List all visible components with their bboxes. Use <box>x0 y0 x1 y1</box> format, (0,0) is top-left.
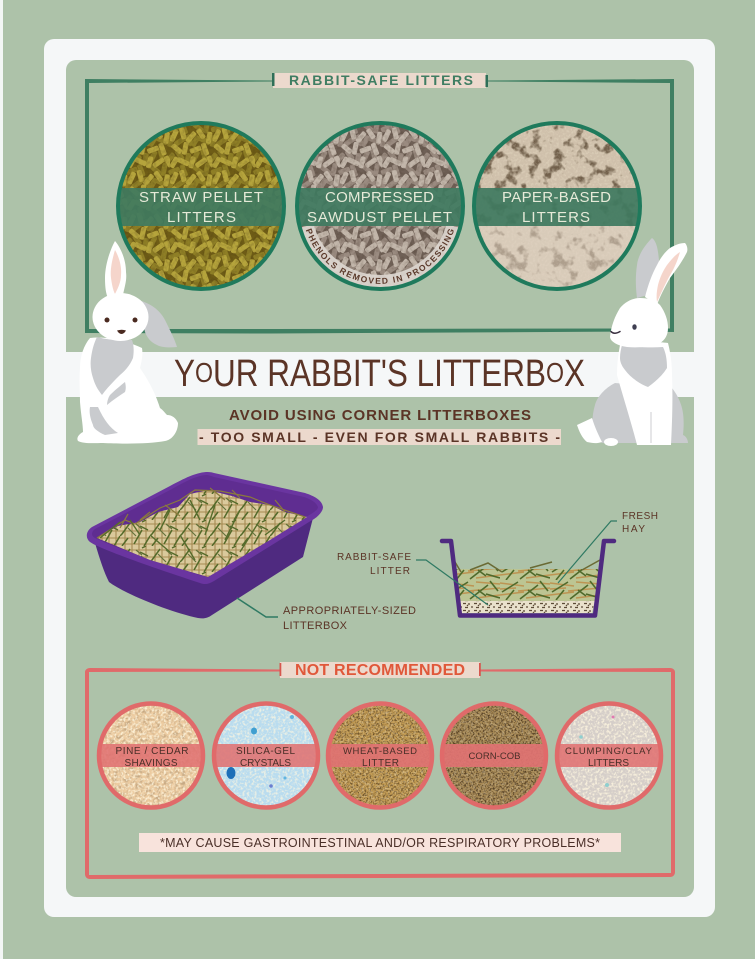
circle: clumping/clay litters <box>555 702 663 810</box>
circle: wheat-based litter <box>326 702 434 810</box>
heading: rabbit-safe litters: RABBIT-SAFE LITTERS <box>289 72 473 88</box>
title: UR RABBIT'S LITTERB <box>213 353 546 395</box>
panel: rabbit-safe litters <box>85 72 674 334</box>
circle: silica-gel crystals <box>212 702 320 810</box>
leader line: rabbit-safe litter <box>416 560 488 605</box>
circle: wheat-based litter: LITTER <box>362 758 399 769</box>
title: O <box>195 357 213 388</box>
text: avoid corner litterboxes: AVOID USING CORNER LITTERBOXES <box>229 407 531 424</box>
label: rabbit-safe litter: LITTER <box>370 566 410 577</box>
rabbit right <box>577 238 688 446</box>
curved note: phenols removed: PHENOLS REMOVED IN PROCESSING <box>306 228 454 284</box>
circle: compressed sawdust pellet <box>295 121 465 291</box>
label: appropriately-sized litterbox: APPROPRIATELY-SIZED <box>283 605 416 617</box>
circle: corn-cob <box>440 702 548 810</box>
label: appropriately-sized litterbox: LITTERBOX <box>283 620 348 632</box>
leader line: litterbox <box>237 598 278 617</box>
callout: too small: - TOO SMALL - EVEN FOR SMALL RABBITS - <box>199 429 560 445</box>
circle: pine / cedar shavings <box>97 702 205 810</box>
title band <box>44 352 715 397</box>
inner green panel <box>66 60 694 897</box>
circle: clumping/clay litters: CLUMPING/CLAY <box>565 746 653 757</box>
panel: not recommended <box>85 662 675 879</box>
title: X <box>564 353 585 395</box>
label: rabbit-safe litter <box>337 552 411 577</box>
circle: straw pellet litters: LITTERS <box>167 209 236 226</box>
note: health warning: *MAY CAUSE GASTROINTESTINAL AND/OR RESPIRATORY PROBLEMS* <box>160 836 600 850</box>
leader line: fresh hay <box>558 521 617 583</box>
rabbit left <box>77 241 178 444</box>
red frame <box>85 668 675 879</box>
note: health warning <box>139 833 621 852</box>
illustration: purple litterbox <box>87 472 323 618</box>
title: O <box>546 357 564 388</box>
circle: paper-based litters <box>472 121 642 291</box>
circle: silica-gel crystals: SILICA-GEL <box>236 746 295 757</box>
heading: not recommended: NOT RECOMMENDED <box>295 662 465 679</box>
circle: pine / cedar shavings: SHAVINGS <box>124 758 178 769</box>
circle: compressed sawdust pellet: COMPRESSED <box>325 189 434 206</box>
label: fresh hay: HAY <box>622 524 645 535</box>
illustration: litterbox cross-section <box>442 541 614 616</box>
green frame <box>85 79 674 334</box>
label: rabbit-safe litter: RABBIT-SAFE <box>337 552 411 563</box>
circle: wheat-based litter: WHEAT-BASED <box>343 746 417 757</box>
circle: silica-gel crystals: CRYSTALS <box>240 758 291 769</box>
circle: pine / cedar shavings: PINE / CEDAR <box>116 746 188 757</box>
label: appropriately-sized litterbox <box>283 605 416 632</box>
circle: paper-based litters: PAPER-BASED <box>502 189 611 206</box>
circle: corn-cob: CORN-COB <box>468 751 520 762</box>
circle: compressed sawdust pellet: SAWDUST PELLET <box>307 209 452 226</box>
title: Y <box>174 353 199 395</box>
label: fresh hay: FRESH <box>622 511 658 522</box>
circle: straw pellet litters <box>116 121 286 291</box>
circle: clumping/clay litters: LITTERS <box>588 758 629 769</box>
circle: straw pellet litters: STRAW PELLET <box>139 189 263 206</box>
label: fresh hay <box>622 511 658 535</box>
circle: paper-based litters: LITTERS <box>522 209 590 226</box>
